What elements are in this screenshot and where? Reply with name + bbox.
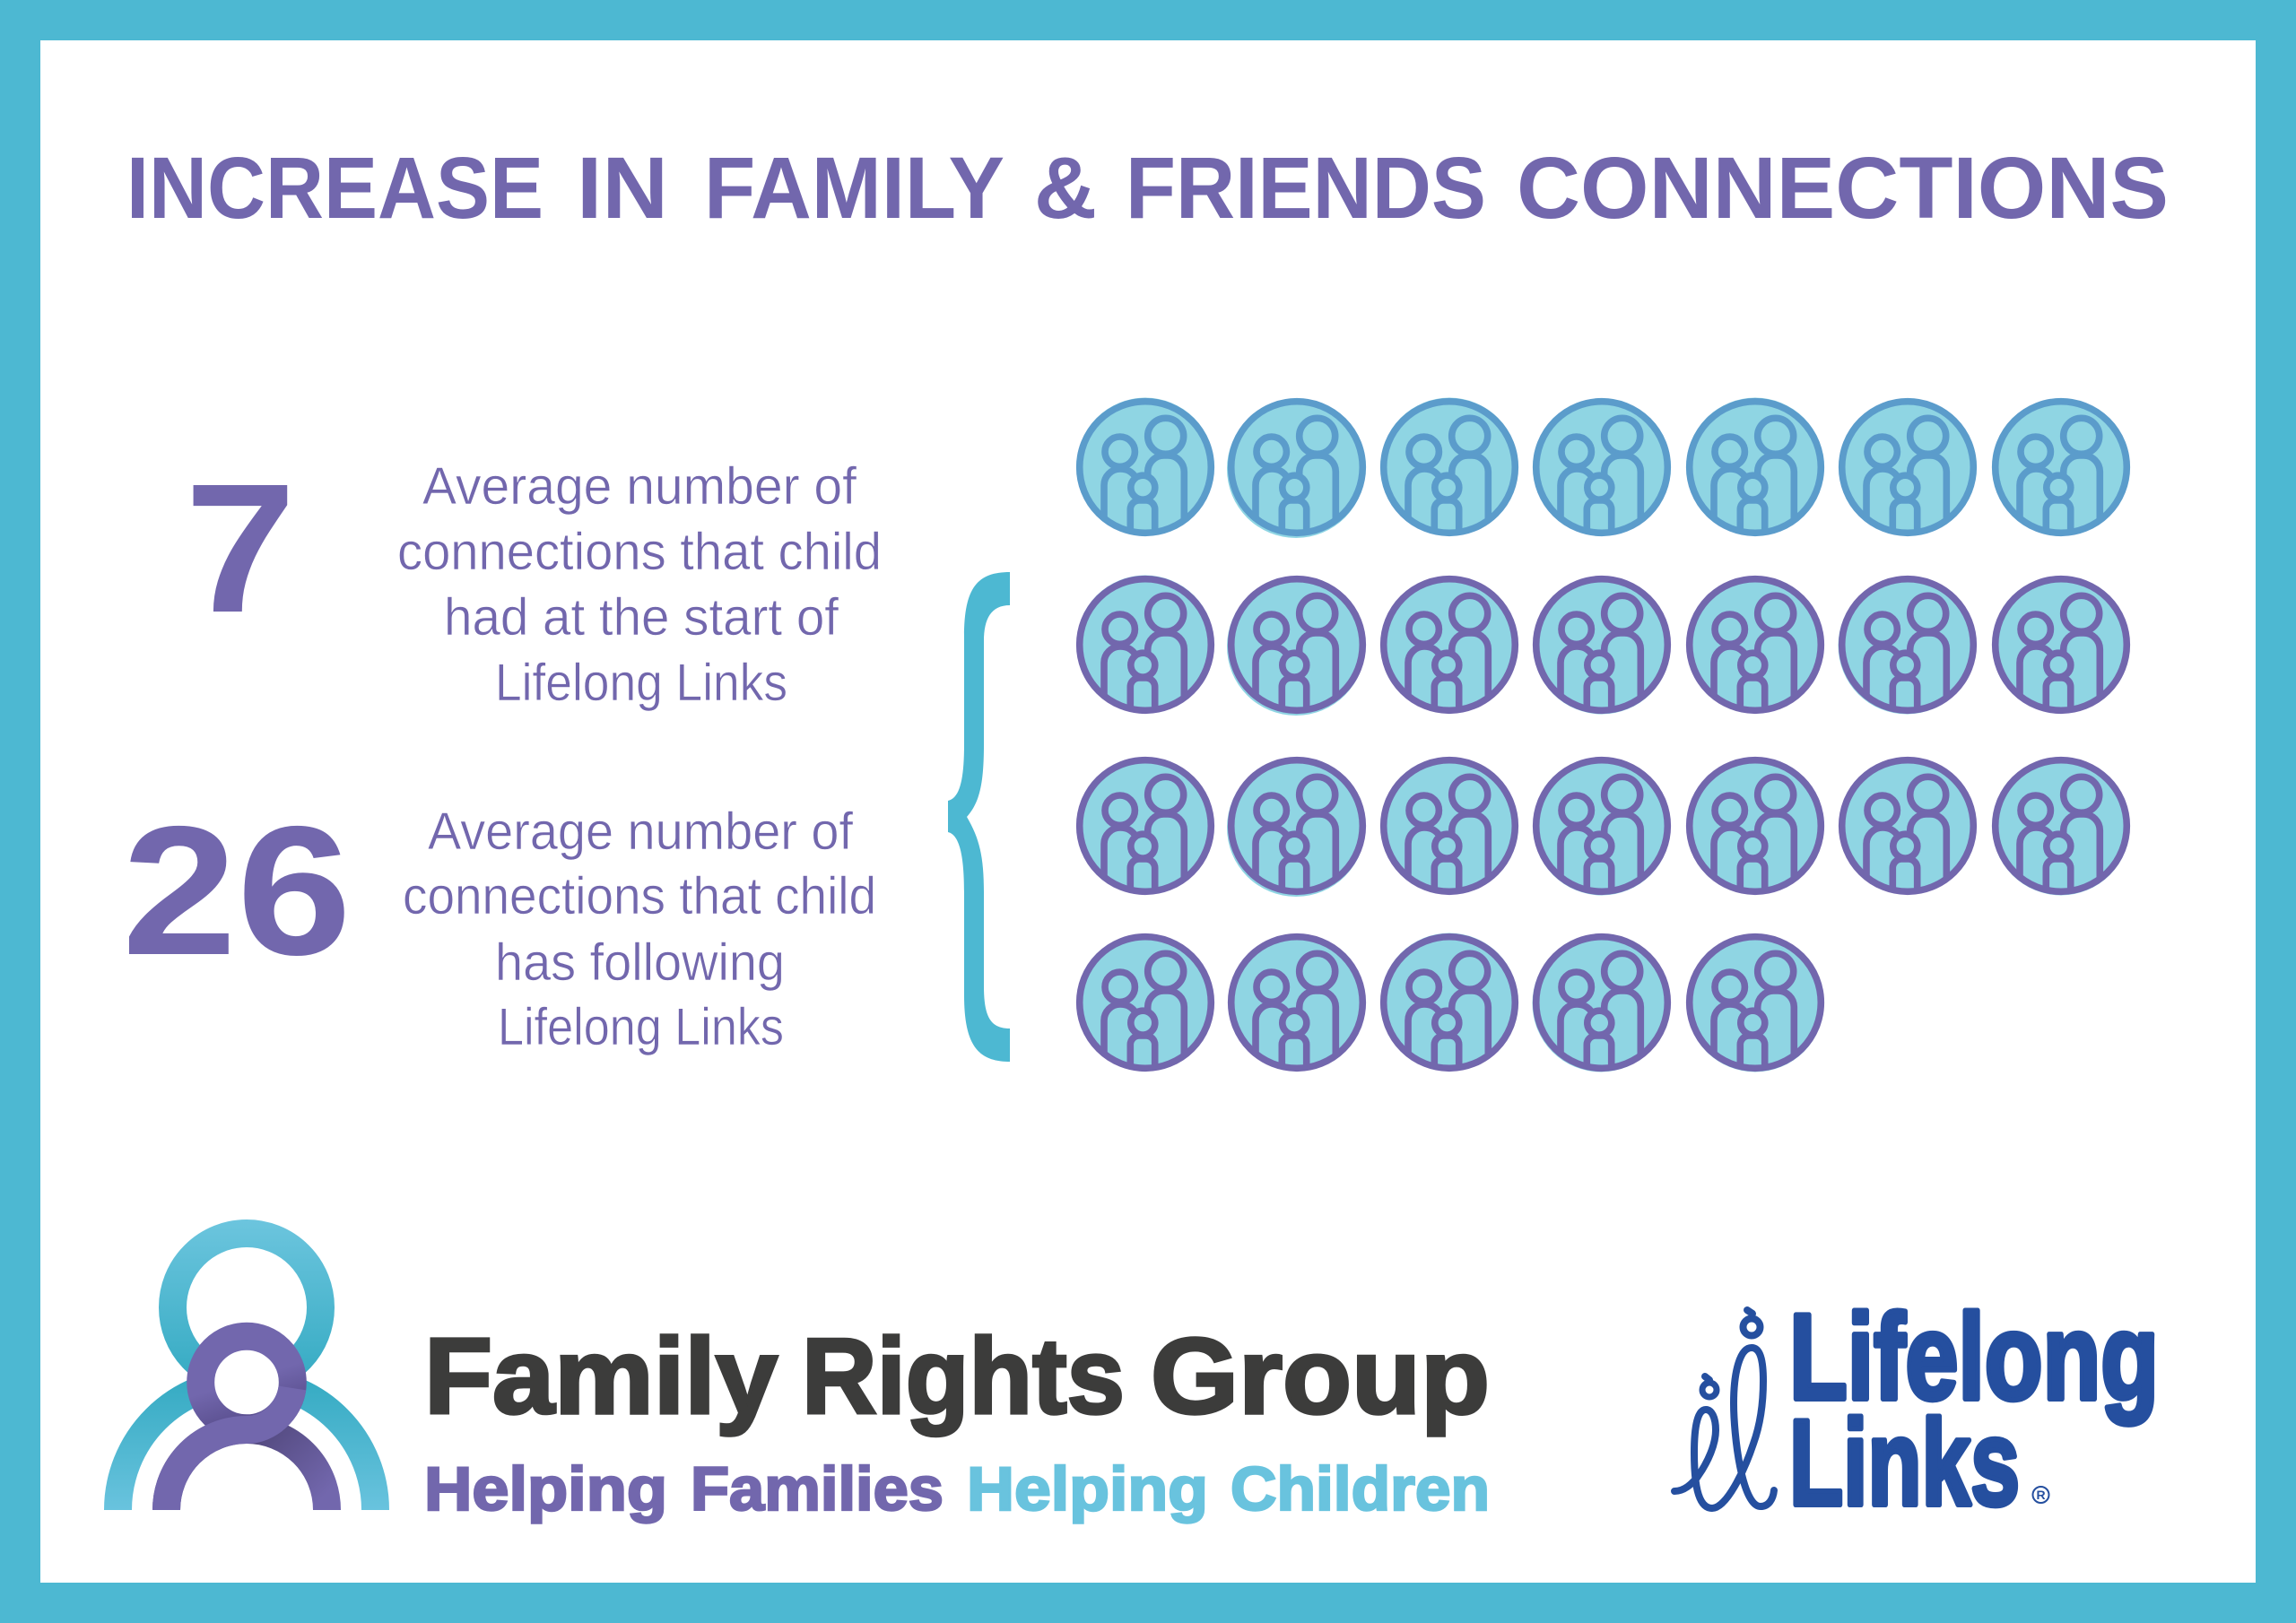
logo mark: Family Rights Group figures — [118, 1234, 375, 1510]
registered mark — [2032, 1487, 2048, 1503]
text: description of following connections: has following — [495, 933, 785, 992]
text: description of start connections: Lifelong Links — [495, 654, 787, 712]
icon row 3: seven purple family icons — [1076, 757, 2129, 897]
icon grid: family connections — [1076, 398, 2129, 1072]
text: description of following connections: Lifelong Links — [498, 998, 784, 1056]
tagline: Helping Families Helping Children: Children — [1231, 1454, 1490, 1523]
tagline: Helping Families Helping Children: Families — [691, 1454, 944, 1523]
text: description of following connections: Average number of — [428, 803, 854, 861]
icon row 4: five purple family icons — [1076, 933, 1824, 1072]
text: description of start connections: connections that child — [397, 523, 882, 581]
icon row 1: seven blue family icons — [1076, 398, 2129, 538]
brand name: Family Rights Group: Group — [1151, 1316, 1490, 1436]
title: FAMILY — [704, 139, 1004, 237]
icon: looped ll figures — [1674, 1310, 1774, 1508]
curly brace — [948, 572, 1010, 1062]
brand name: Family Rights Group: Rights — [802, 1316, 1125, 1436]
wordmark: Links: Links — [1789, 1394, 2020, 1531]
brand name: Family Rights Group — [424, 1316, 1490, 1436]
wordmark: Lifelong: Lifelong — [1789, 1289, 2159, 1425]
title: INCREASE — [126, 139, 544, 237]
text: description of start connections — [397, 457, 882, 712]
tagline: Helping Families Helping Children — [424, 1454, 1490, 1523]
tagline: Helping Families Helping Children: Helping — [424, 1454, 667, 1523]
icon row 2: seven purple family icons — [1076, 576, 2129, 716]
text: description of start connections: had at the start of — [444, 588, 839, 647]
text: description of following connections — [403, 803, 876, 1056]
logo: Lifelong Links — [1674, 1289, 2159, 1531]
title — [126, 139, 2169, 237]
stat: 26 connections following: 26 — [122, 788, 352, 994]
brand name: Family Rights Group: Family — [424, 1316, 778, 1436]
text: description of following connections: connections that child — [403, 867, 876, 925]
title: CONNECTIONS — [1517, 139, 2169, 237]
title: IN — [577, 139, 668, 237]
stat: 7 connections at start: 7 — [185, 446, 296, 651]
title: & — [1034, 139, 1097, 237]
tagline: Helping Families Helping Children: Helping — [967, 1454, 1208, 1523]
text: description of start connections: Average number of — [422, 457, 857, 516]
title: FRIENDS — [1126, 139, 1486, 237]
registered mark: R — [2036, 1488, 2046, 1502]
